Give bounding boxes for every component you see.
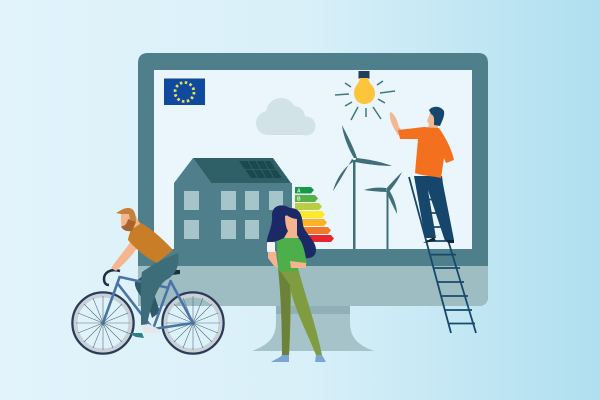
- face and neck: [284, 215, 299, 238]
- energy rating label: [295, 187, 334, 242]
- head and beard: [121, 210, 136, 231]
- woman: [267, 205, 326, 362]
- neck: [128, 216, 140, 229]
- handlebar: [104, 270, 120, 285]
- hair: [429, 107, 444, 126]
- trousers: [278, 268, 322, 355]
- hair back: [267, 205, 316, 258]
- solar panels: [239, 161, 282, 178]
- EU flag: [164, 78, 205, 105]
- hand holding phone: [268, 251, 278, 268]
- arm raised: [390, 112, 403, 135]
- light bulb: [335, 71, 395, 120]
- monitor: [138, 53, 488, 306]
- arm: [111, 238, 140, 271]
- cloud: [256, 98, 316, 136]
- neck and face: [427, 113, 438, 128]
- energy rating label: A: [297, 188, 301, 194]
- phone: [267, 242, 275, 252]
- ladder: [409, 177, 476, 333]
- top: [277, 238, 307, 271]
- other hand: [290, 261, 306, 268]
- hair: [116, 208, 136, 222]
- wind turbines: [333, 125, 402, 249]
- monitor stand: [252, 306, 374, 351]
- shoes: [423, 237, 454, 243]
- t-shirt: [128, 222, 173, 263]
- saddle: [168, 270, 180, 275]
- house: [174, 158, 292, 249]
- shoes: [271, 355, 326, 362]
- hair fringe: [278, 206, 298, 236]
- front leg: [141, 253, 178, 325]
- light rays: [335, 81, 395, 120]
- front wheel: [72, 292, 134, 354]
- rear wheel: [162, 292, 224, 354]
- cyclist: [72, 208, 224, 354]
- trousers: [414, 176, 454, 241]
- roof: [193, 158, 291, 183]
- sweater: [398, 127, 454, 178]
- bike frame: [103, 276, 193, 329]
- windows: [184, 191, 283, 239]
- shoe and pedal: [141, 324, 160, 333]
- man on ladder: [390, 107, 454, 243]
- back leg: [135, 262, 170, 318]
- energy rating label: B: [297, 196, 301, 202]
